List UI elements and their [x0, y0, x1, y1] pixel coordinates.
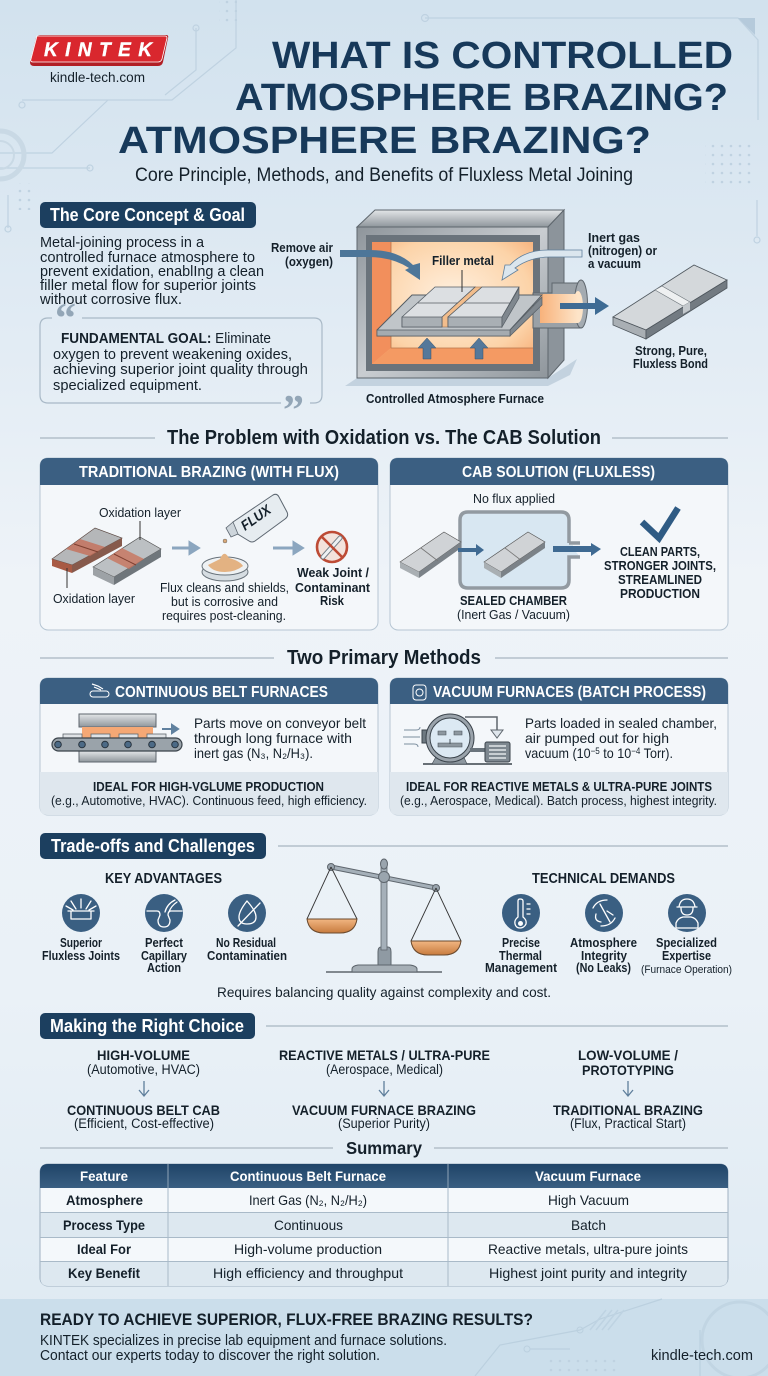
tray — [377, 295, 542, 336]
heading: trade-offs — [40, 833, 728, 859]
summary table: Atmosphere — [66, 1192, 143, 1208]
summary table: High efficiency and throughput — [213, 1265, 403, 1281]
icon: vacuum small — [413, 685, 426, 700]
panel: CAB solution: SEALED CHAMBER — [460, 593, 568, 608]
summary table: Inert Gas (N₂, N₂/H₂) — [249, 1192, 367, 1208]
arrow inert gas — [502, 250, 582, 280]
icon: flux bottle: FLUX — [238, 501, 275, 533]
key advantages — [42, 871, 287, 975]
technical demands: (Furnace Operation) — [641, 964, 732, 976]
panel: traditional brazing: Oxidation layer — [53, 591, 136, 606]
footer band — [0, 1299, 768, 1376]
circuit decoration top — [0, 0, 760, 243]
key advantages: KEY ADVANTAGES — [105, 871, 222, 887]
icon: expert — [668, 894, 706, 932]
panel: vacuum furnaces: vacuum (10 — [525, 745, 598, 761]
technical demands: Atmosphere — [570, 936, 637, 950]
panel: traditional brazing: Oxidation layer — [99, 505, 182, 520]
icon: flux dish — [202, 554, 248, 581]
choice: reactive metals: VACUUM FURNACE BRAZING — [292, 1102, 476, 1118]
choice: high volume: CONTINUOUS BELT CAB — [67, 1102, 220, 1118]
icon: no contaminant — [317, 532, 347, 562]
footer band: KINTEK specializes in precise lab equipment and furnace solutions. — [40, 1333, 447, 1349]
panel: traditional brazing: TRADITIONAL BRAZING (WITH FLUX) — [79, 464, 339, 481]
belt furnace illustration — [52, 714, 182, 762]
summary table: Key Benefit — [68, 1265, 140, 1281]
icon: flux bottle — [223, 494, 288, 543]
labels: Inert gas — [588, 230, 640, 245]
panel: vacuum furnaces: IDEAL FOR REACTIVE METALS & ULTRA-PURE JOINTS — [406, 779, 712, 794]
labels: (nitrogen) or — [588, 243, 657, 258]
choice: high volume — [67, 1047, 220, 1131]
core concept text: controlled furnace atmosphere to — [40, 249, 255, 266]
icon: capillary — [145, 894, 183, 932]
oxidized metal parts — [52, 521, 161, 588]
panel: continuous belt furnaces: CONTINUOUS BELT FURNACES — [115, 684, 328, 701]
brazed output part — [613, 265, 727, 371]
panel: continuous belt furnaces: Parts move on conveyor belt — [194, 715, 366, 731]
callout: fundamental goal: ” — [283, 388, 304, 434]
heading: right choice: Making the Right Choice — [50, 1016, 244, 1036]
callout: fundamental goal: oxygen to prevent weakening oxides, — [53, 346, 292, 363]
panel: vacuum furnaces: −4 — [631, 746, 640, 756]
arrow remove air — [340, 250, 420, 280]
technical demands: Thermal — [499, 949, 542, 963]
vacuum chamber illustration — [403, 714, 512, 764]
arrow — [172, 543, 198, 553]
heading: right choice — [40, 1013, 728, 1039]
panel: CAB solution: CAB SOLUTION (FLUXLESS) — [462, 464, 655, 481]
panel: vacuum furnaces: −5 — [591, 746, 600, 756]
title: WHAT IS CONTROLLED — [272, 35, 733, 77]
panel: CAB solution: STRONGER JOINTS, — [604, 558, 716, 573]
icon: superior joints — [62, 894, 100, 932]
key advantages: Action — [147, 961, 181, 975]
brazed output part: Fluxless Bond — [633, 356, 708, 371]
panel: traditional brazing — [40, 458, 378, 630]
core concept text: prevent exidation, enablIng a clean — [40, 263, 264, 280]
heading: trade-offs: Trade-offs and Challenges — [51, 836, 255, 856]
choice: reactive metals: (Superior Purity) — [338, 1116, 430, 1131]
title: ATMOSPHERE BRAZING? — [118, 120, 651, 162]
summary table: Continuous — [274, 1217, 343, 1233]
key advantages: Perfect — [145, 936, 184, 950]
panel: vacuum furnaces — [390, 678, 728, 815]
core concept text: without corrosive flux. — [39, 291, 182, 308]
icon: no residue — [228, 894, 266, 932]
panel: traditional brazing: Flux cleans and shields, — [160, 580, 289, 595]
labels: (oxygen) — [285, 254, 333, 269]
panel: vacuum furnaces: air pumped out for high — [525, 730, 669, 746]
logo: KINTEK — [44, 40, 153, 61]
logo — [30, 35, 168, 85]
technical demands: (No Leaks) — [576, 961, 631, 975]
arrow out — [553, 543, 601, 556]
key advantages: Contaminatien — [207, 949, 287, 963]
summary table — [40, 1164, 728, 1286]
callout: fundamental goal: specialized equipment. — [53, 377, 202, 394]
labels: Remove air — [271, 240, 333, 255]
core concept text: filler metal flow for superior joints — [40, 277, 256, 294]
brazed output part: Strong, Pure, — [635, 343, 707, 358]
icon: thermometer — [502, 894, 540, 932]
callout: fundamental goal: “ — [55, 296, 76, 342]
callout: fundamental goal — [40, 296, 322, 434]
panel: vacuum furnaces: VACUUM FURNACES (BATCH PROCESS) — [433, 684, 706, 701]
footer band: Contact our experts today to discover the right solution. — [40, 1348, 380, 1364]
choice: high volume: HIGH-VOLUME — [97, 1047, 190, 1063]
core concept text — [39, 234, 264, 308]
panel: CAB solution: PRODUCTION — [620, 586, 700, 601]
technical demands — [485, 871, 732, 976]
core concept text: Metal-joining process in a — [40, 234, 205, 251]
panel: vacuum furnaces: (e.g., Aerospace, Medical). Batch process, highest integrity. — [400, 793, 717, 808]
sealed chamber — [460, 512, 580, 588]
summary table: High Vacuum — [548, 1192, 629, 1208]
summary table: Continuous Belt Furnace — [230, 1168, 386, 1184]
footer band: READY TO ACHIEVE SUPERIOR, FLUX-FREE BRAZING RESULTS? — [40, 1310, 533, 1329]
technical demands: TECHNICAL DEMANDS — [532, 871, 675, 887]
panel: continuous belt furnaces: inert gas (N₃, N₂/H₃). — [194, 745, 313, 761]
labels: a vacuum — [588, 256, 641, 271]
heading: summary: Summary — [346, 1138, 422, 1158]
choice: low volume — [553, 1047, 703, 1131]
panel: vacuum furnaces: to 10 — [600, 745, 631, 761]
icon: balance scale — [307, 859, 461, 972]
summary table: Highest joint purity and integrity — [489, 1265, 687, 1281]
choice: reactive metals — [279, 1047, 490, 1131]
up arrows — [418, 338, 436, 359]
panel: continuous belt furnaces: (e.g., Automotive, HVAC). Continuous feed, high efficiency. — [51, 793, 367, 808]
panel: CAB solution: No flux applied — [473, 491, 555, 506]
key advantages: No Residual — [216, 936, 276, 950]
logo: kindle-tech.com — [50, 69, 145, 85]
technical demands: Management — [485, 961, 558, 975]
arrow in — [458, 544, 484, 556]
key advantages: Capillary — [141, 949, 187, 963]
labels: Filler metal — [432, 253, 494, 268]
choice: high volume: (Efficient, Cost-effective) — [74, 1116, 214, 1131]
heading: two primary methods: Two Primary Methods — [287, 647, 481, 669]
icon: check — [642, 508, 678, 538]
technical demands: Integrity — [581, 949, 627, 963]
panel: traditional brazing: Weak Joint / — [297, 565, 369, 580]
labels: Controlled Atmosphere Furnace — [366, 391, 544, 406]
panel: CAB solution: STREAMLINED — [618, 572, 702, 587]
summary table: Reactive metals, ultra-pure joints — [488, 1241, 688, 1257]
summary table: Process Type — [63, 1217, 145, 1233]
furnace diagram — [271, 210, 657, 406]
summary table: Ideal For — [77, 1241, 131, 1257]
metal blocks — [442, 287, 482, 327]
panel: CAB solution — [390, 458, 728, 630]
panel: CAB solution: CLEAN PARTS, — [620, 544, 700, 559]
callout: fundamental goal: FUNDAMENTAL GOAL: Eliminate — [61, 330, 271, 347]
summary table: Feature — [80, 1168, 128, 1184]
key advantages: Superior — [60, 936, 102, 950]
summary table: Vacuum Furnace — [535, 1168, 641, 1184]
panel: continuous belt furnaces: through long furnace with — [194, 730, 352, 746]
panel: CAB solution: (Inert Gas / Vacuum) — [457, 607, 570, 622]
panel: continuous belt furnaces — [40, 678, 378, 815]
panel: vacuum furnaces: Parts loaded in sealed chamber, — [525, 715, 717, 731]
icon: belt small — [90, 684, 109, 697]
technical demands: Specialized — [656, 936, 717, 950]
key advantages: Fluxless Joints — [42, 949, 120, 963]
choice: low volume: (Flux, Practical Start) — [570, 1116, 686, 1131]
parts — [400, 532, 545, 578]
technical demands: Expertise — [662, 949, 711, 963]
technical demands: Precise — [502, 936, 540, 950]
heading: core concept: The Core Concept & Goal — [50, 205, 245, 225]
subtitle: Core Principle, Methods, and Benefits of Fluxless Metal Joining — [135, 165, 633, 186]
panel: vacuum furnaces: Torr). — [640, 745, 673, 761]
choice: low volume: LOW-VOLUME / — [578, 1047, 678, 1063]
footer band: kindle-tech.com — [651, 1348, 753, 1364]
panel: continuous belt furnaces: IDEAL FOR HIGH-VGLUME PRODUCTION — [93, 779, 324, 794]
choice: high volume: (Automotive, HVAC) — [87, 1062, 200, 1077]
choice: reactive metals: (Aerospace, Medical) — [326, 1062, 443, 1077]
title: ATMOSPHERE BRAZING? — [235, 77, 728, 119]
panel: traditional brazing: Contaminant — [295, 580, 371, 595]
choice: low volume: PROTOTYPING — [582, 1062, 674, 1078]
output arrow — [560, 297, 609, 315]
callout: fundamental goal: achieving superior joint quality through — [53, 361, 308, 378]
summary table: Batch — [571, 1217, 606, 1233]
choice: reactive metals: REACTIVE METALS / ULTRA-PURE — [279, 1047, 490, 1063]
title — [118, 35, 733, 162]
heading: oxidation vs CAB: The Problem with Oxidation vs. The CAB Solution — [167, 427, 601, 449]
panel: traditional brazing: requires post-cleaning. — [162, 608, 286, 623]
trade-off note: Requires balancing quality against complexity and cost. — [217, 984, 551, 1000]
labels — [271, 230, 657, 406]
panel: traditional brazing: but is corrosive and — [171, 594, 278, 609]
choice: low volume: TRADITIONAL BRAZING — [553, 1102, 703, 1118]
arrow — [273, 543, 302, 553]
icon: atmosphere integrity — [585, 894, 623, 932]
panel: traditional brazing: Risk — [320, 593, 345, 608]
pipe — [533, 280, 588, 328]
summary table: High-volume production — [234, 1241, 382, 1257]
